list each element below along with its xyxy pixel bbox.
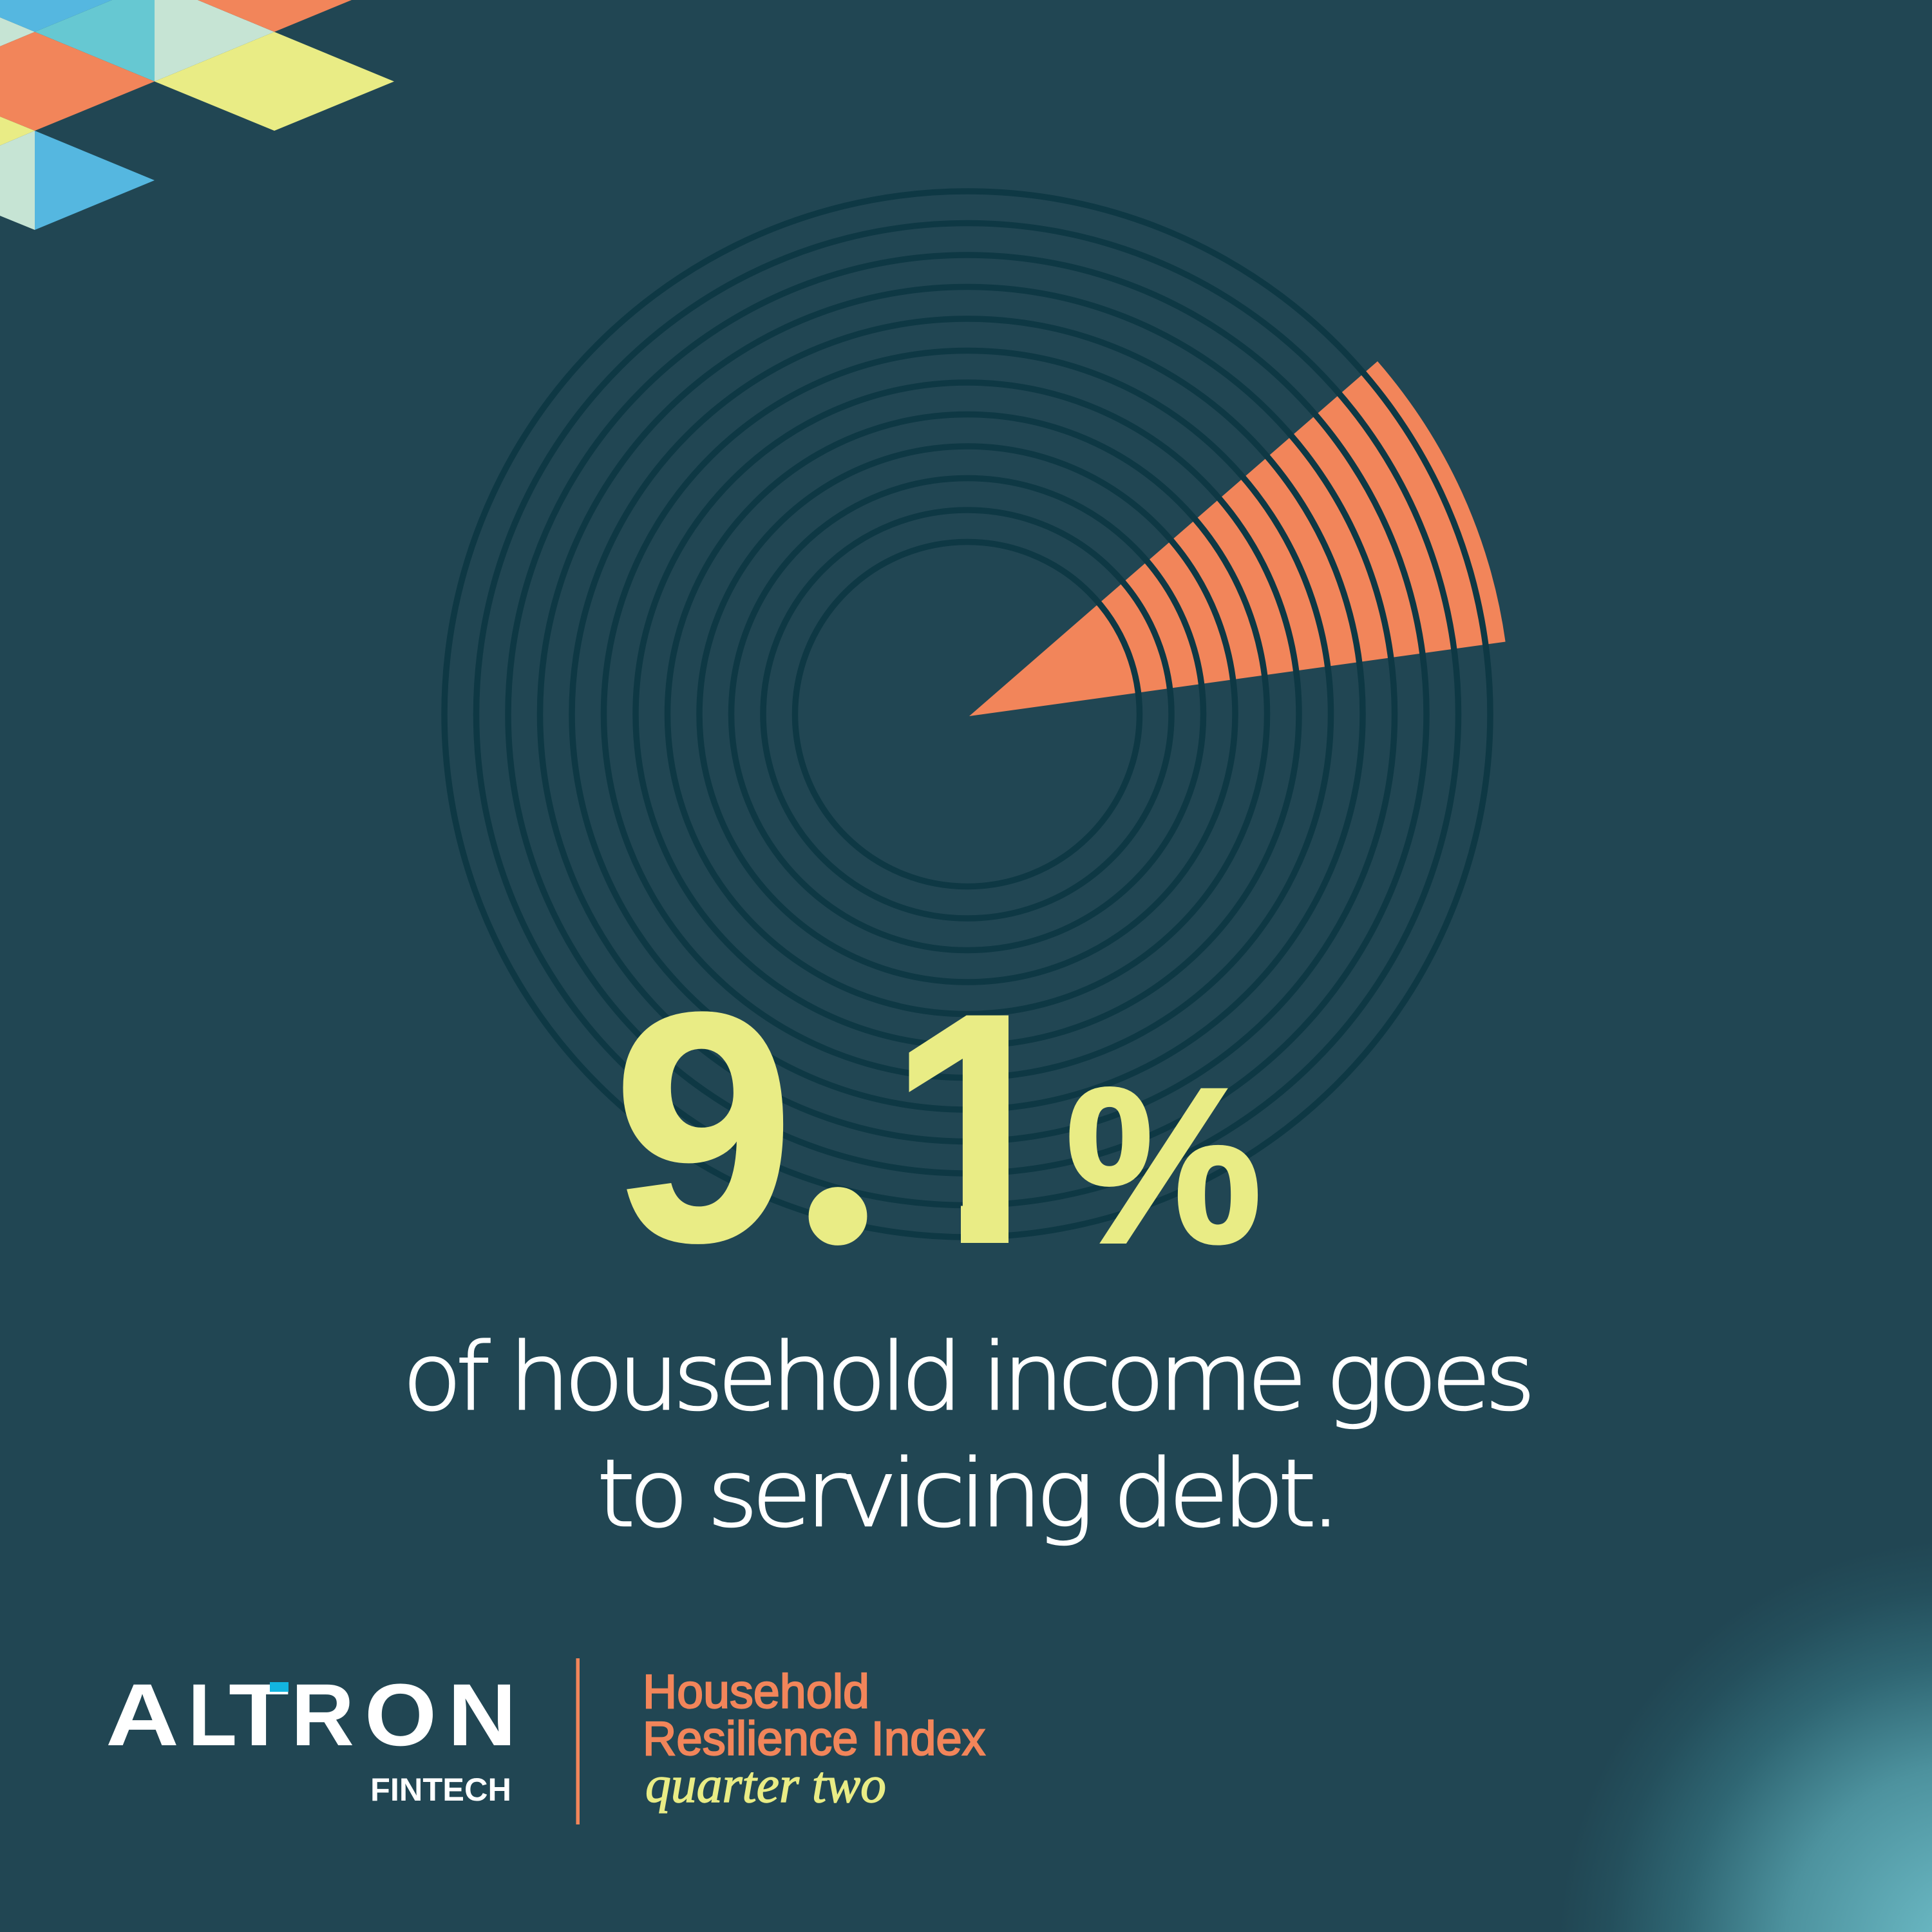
headline stat: 9.1%: .	[793, 920, 883, 1319]
statement text: to servicing debt.	[597, 1439, 1335, 1548]
logo: Altron Fintech: A	[106, 1666, 179, 1765]
logo: Altron Fintech: O	[365, 1666, 437, 1765]
logo: Altron Fintech: T	[229, 1666, 289, 1765]
logo: Altron Fintech	[106, 1666, 516, 1808]
geometric triangles: top left	[0, 0, 394, 230]
headline stat: 9.1%: 1	[889, 947, 1070, 1311]
headline stat: 9.1%: 9	[613, 946, 794, 1309]
pie wedge: 9.1% slice	[969, 361, 1506, 716]
logo: Altron Fintech: L	[188, 1666, 237, 1765]
report title: Household	[643, 1665, 869, 1718]
logo: Altron Fintech: R	[291, 1666, 354, 1765]
logo: Altron Fintech: N	[448, 1666, 516, 1765]
statement text: of household income goes	[402, 1323, 1530, 1431]
report title: Resilience Index	[643, 1712, 985, 1765]
headline stat: 9.1%: %	[1066, 1043, 1262, 1289]
headline stat: 9.1%	[623, 1011, 1258, 1245]
statement text	[402, 1323, 1530, 1548]
concentric rings	[444, 191, 1490, 1237]
background glow: bottom right	[1417, 1481, 1932, 1932]
quarter label: quarter two	[645, 1757, 886, 1814]
report title	[643, 1665, 985, 1765]
divider line	[576, 1658, 580, 1824]
logo: Altron Fintech: FINTECH	[370, 1772, 511, 1808]
